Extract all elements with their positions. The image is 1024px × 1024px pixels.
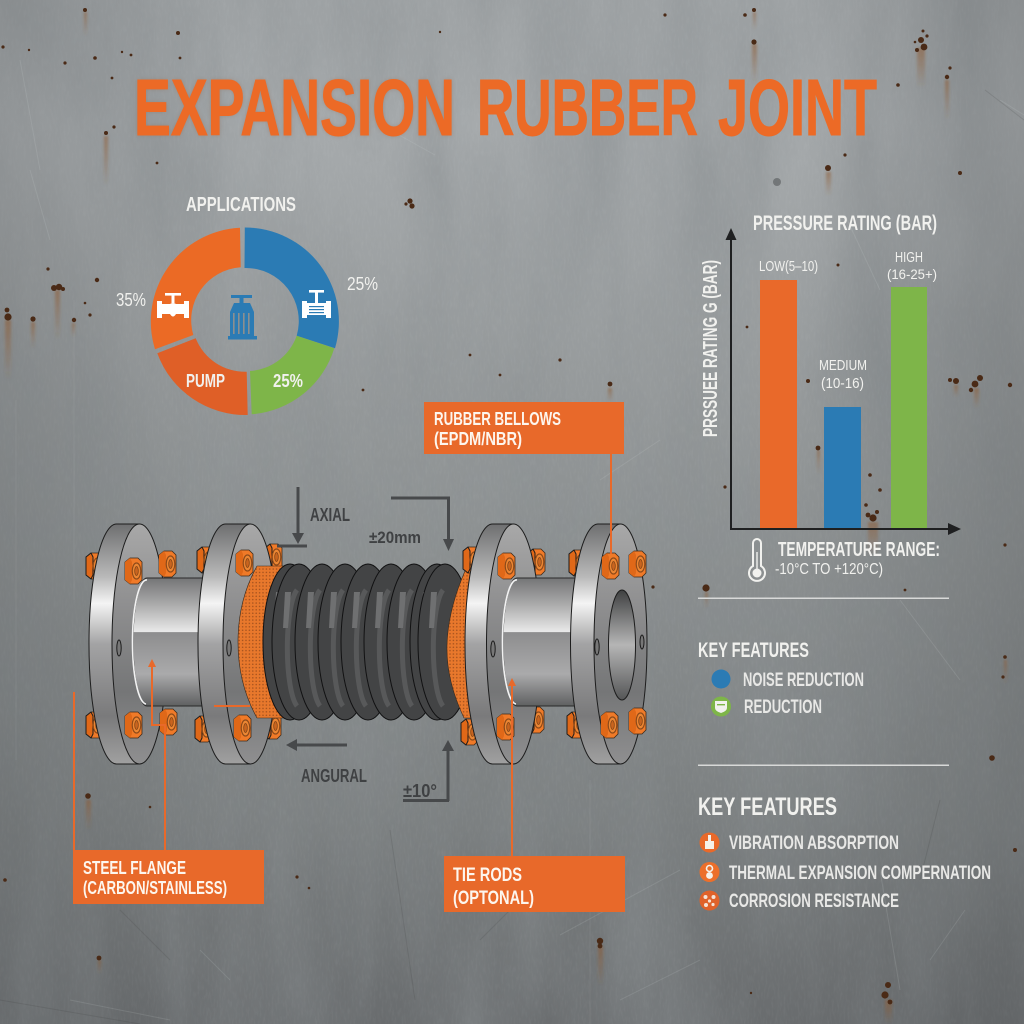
title: EXPANSION — [134, 63, 455, 152]
panel: key features upper — [698, 639, 864, 718]
icon: blue pump in donut centre — [228, 295, 257, 340]
label: medium — [819, 357, 867, 392]
label: 35%: 35% — [116, 290, 146, 310]
panel: pressure rating bar chart — [700, 212, 961, 535]
bar: low — [760, 280, 797, 528]
arrow: axial movement — [277, 487, 307, 548]
label: high: (16-25+) — [887, 266, 937, 282]
label: pump: PUMP — [186, 371, 225, 391]
label: high: HIGH — [895, 249, 923, 266]
title: EXPANSION — [134, 63, 455, 152]
title: JOINT — [718, 63, 877, 152]
dotted orange sleeve right — [447, 571, 482, 718]
left flange 1 — [86, 524, 167, 764]
label: axial: AXIAL — [310, 505, 350, 525]
donut segment: pump — [157, 338, 248, 415]
nuts on flange 2 — [234, 550, 253, 741]
callout: tie rods — [444, 678, 625, 912]
heading: applications: APPLICATIONS — [186, 194, 296, 216]
text: corrosion resistance: CORROSION RESISTANCE — [729, 891, 899, 912]
label: +-10 degrees: ±10° — [403, 781, 437, 801]
donut segment: green 25% — [250, 336, 334, 414]
icon: white valve on blue — [302, 290, 331, 318]
y axis label: PRSSUEE RATING G (BAR) — [700, 260, 722, 437]
black rubber bellows — [263, 564, 472, 720]
icon: vibration — [700, 832, 720, 852]
title — [134, 63, 877, 152]
right flange 4 with bore — [567, 524, 647, 764]
callout: rubber bellows: RUBBER BELLOWS — [434, 409, 561, 429]
icon: blue dot — [712, 670, 730, 688]
callout: tie rods: (OPTONAL) — [453, 888, 534, 909]
label: 25% green: 25% — [273, 371, 303, 391]
panel: expansion joint cross-section — [86, 524, 647, 764]
left pipe — [132, 578, 204, 706]
donut segment: orange 35% — [151, 228, 241, 349]
callout: tie rods: TIE RODS — [453, 865, 522, 886]
bar: medium — [824, 407, 861, 528]
callout: rubber bellows: (EPDM/NBR) — [434, 429, 522, 449]
icon: green badge — [711, 696, 731, 716]
arrow: angular movement — [286, 739, 347, 751]
arrow: +-20mm bracket — [391, 496, 454, 551]
icon: thermal — [700, 862, 720, 882]
heading: pressure rating: PRESSURE RATING (BAR) — [753, 212, 937, 235]
label: high — [887, 249, 937, 282]
bar: high — [891, 287, 927, 528]
axes — [726, 228, 961, 535]
nuts on flange 4 — [601, 551, 646, 738]
text: temperature range — [775, 539, 940, 578]
donut segment: blue 25% — [244, 227, 339, 348]
label: medium: MEDIUM — [819, 357, 867, 374]
heading: KEY FEATURES — [698, 639, 809, 662]
panel: applications donut chart — [116, 194, 378, 415]
label: low: LOW(5–10) — [759, 259, 818, 275]
icon: corrosion — [700, 890, 720, 910]
label: angular: ANGURAL — [301, 766, 367, 786]
nuts on flange 1 — [125, 551, 177, 738]
icon: white valve on orange — [157, 293, 189, 318]
callout: steel flange — [73, 659, 264, 904]
icon: thermometer — [749, 539, 765, 581]
right flange 3 — [461, 524, 545, 764]
text: temperature range: -10°C TO +120°C) — [775, 561, 883, 578]
nuts on flange 3 — [497, 553, 515, 740]
arrow: small orange pointer to sleeve — [214, 705, 250, 707]
callout: steel flange: (CARBON/STAINLESS) — [83, 878, 227, 898]
arrow: +-10 degrees — [403, 740, 454, 802]
dotted orange sleeve left — [238, 566, 285, 718]
callout: rubber bellows — [424, 402, 624, 554]
label: 25% blue: 25% — [347, 274, 378, 294]
callout: steel flange: STEEL FLANGE — [83, 858, 186, 878]
text: temperature range: TEMPERATURE RANGE: — [778, 539, 940, 561]
label: medium: (10-16) — [821, 375, 864, 392]
title: RUBBER — [477, 63, 698, 152]
text: vibration absorption: VIBRATION ABSORPTION — [729, 833, 899, 854]
panel: key features lower — [698, 793, 991, 912]
right pipe — [502, 578, 575, 706]
label: +-20mm: ±20mm — [369, 528, 421, 547]
text: noise reduction: NOISE REDUCTION — [743, 670, 864, 691]
left flange 2 — [195, 524, 282, 764]
heading: KEY FEATURES — [698, 793, 837, 821]
text: reduction: REDUCTION — [744, 697, 822, 718]
